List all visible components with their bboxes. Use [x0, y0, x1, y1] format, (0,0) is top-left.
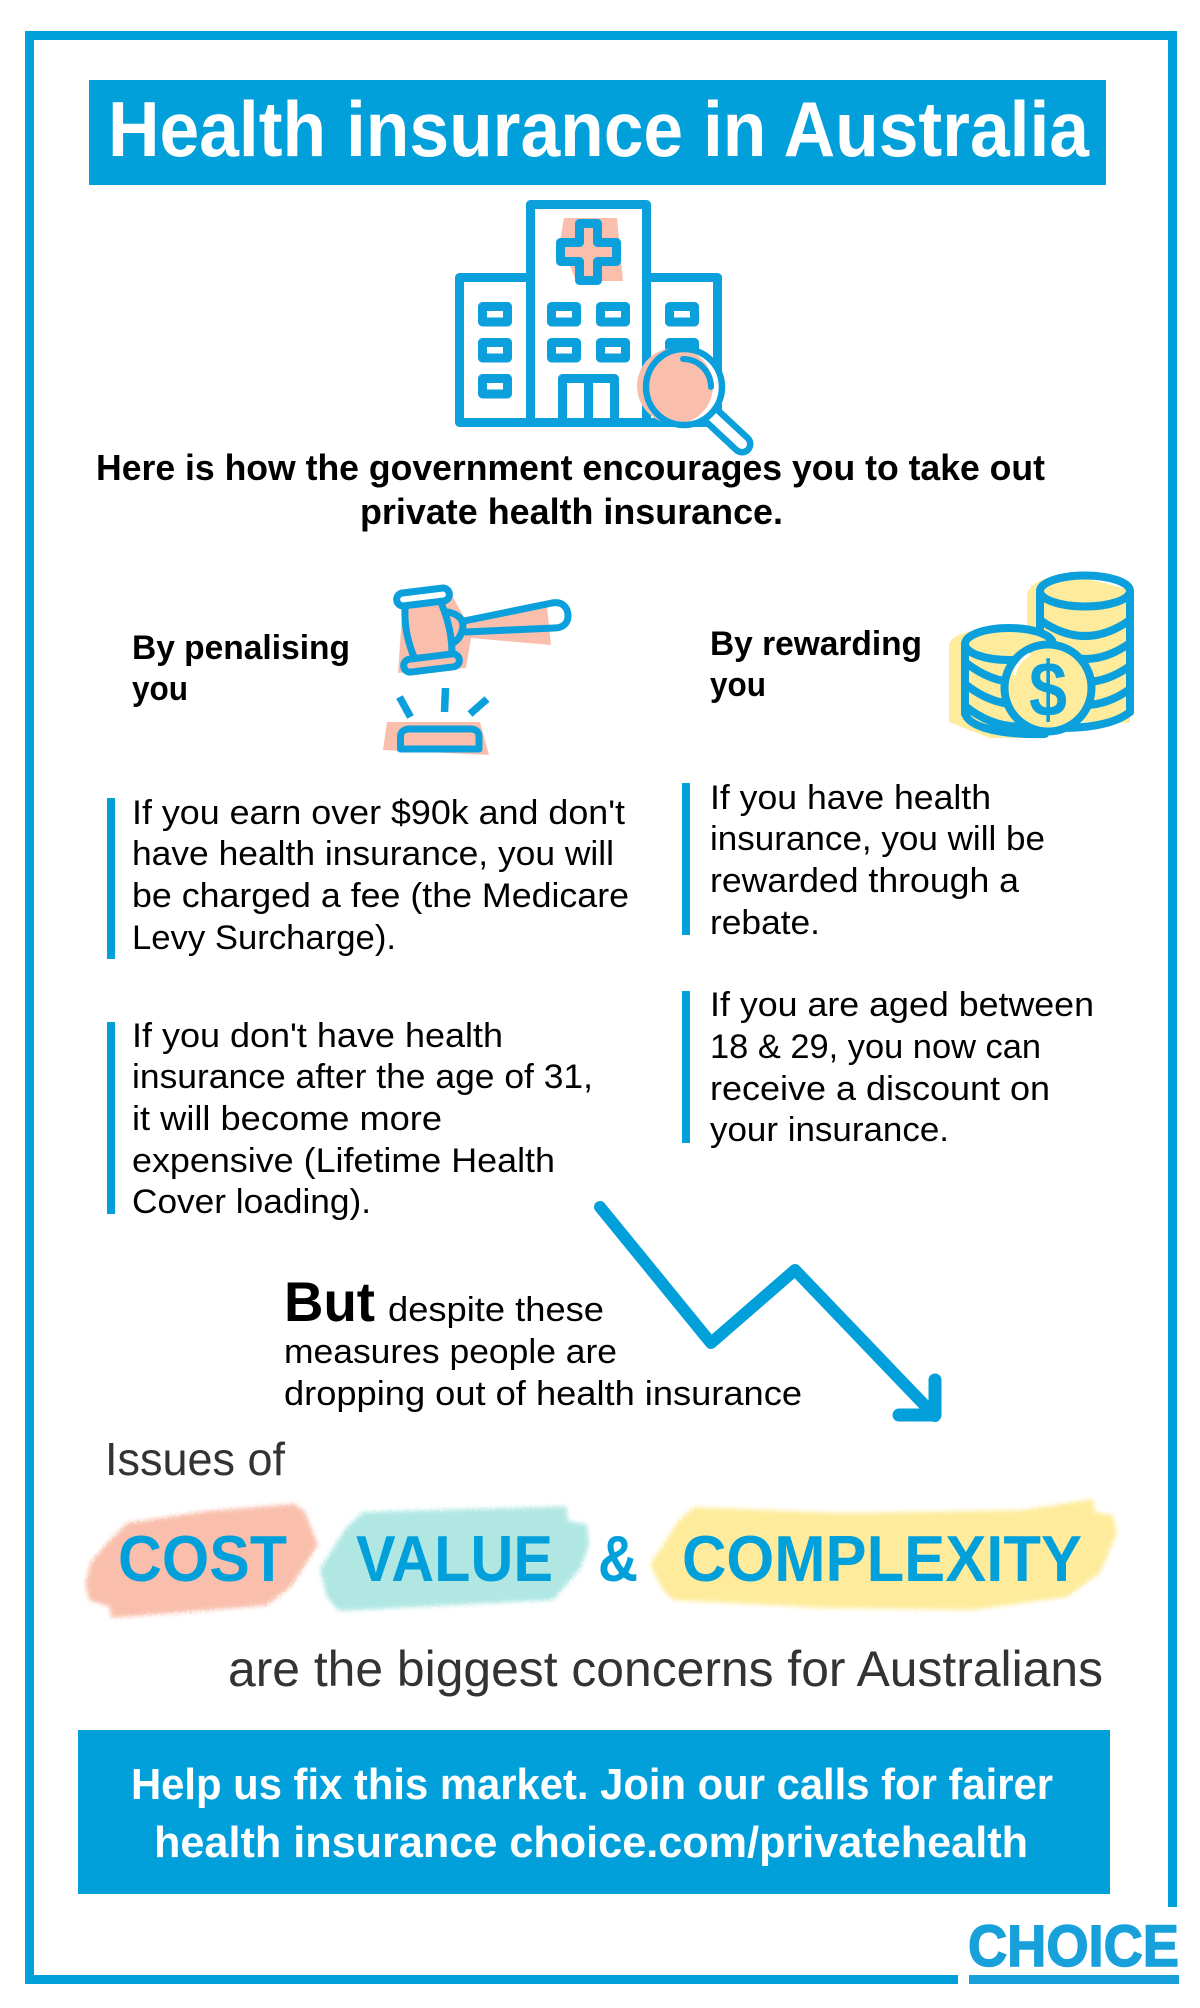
text block: rebate: rebate. [710, 904, 820, 942]
text block: rebate: If you have health [710, 779, 991, 817]
panel: by rewarding you [682, 574, 1130, 1149]
text block: rebate [682, 779, 1045, 942]
title banner: Health insurance in Australia [108, 85, 1090, 173]
heading: by penalising you [132, 629, 350, 708]
text: but despite these measures: dropping out of health insurance [284, 1375, 802, 1413]
text: biggest concerns: are the biggest concerns for Australians [228, 1641, 1103, 1697]
call to action banner: health insurance choice.com/privatehealth [154, 1818, 1028, 1867]
logo: CHOICE: CHOICE [968, 1914, 1179, 1979]
icon: coin stacks [949, 574, 1130, 738]
text block: Lifetime Health Cover loading: insurance after the age of 31, [132, 1058, 593, 1096]
text block: Medicare Levy Surcharge: have health insurance, you will [132, 835, 614, 873]
text: but despite these measures [284, 1270, 802, 1413]
text block: Lifetime Health Cover loading [107, 1017, 593, 1221]
text block: Medicare Levy Surcharge: If you earn over $90k and don't [132, 794, 626, 832]
text: but despite these measures: But [284, 1270, 375, 1333]
text block: rebate: rewarded through a [710, 862, 1019, 900]
text block: age-based discount [682, 986, 1094, 1149]
intro text: private health insurance. [360, 491, 783, 532]
intro text: Here is how the government encourages you to take out [96, 447, 1045, 488]
text: but despite these measures: measures people are [284, 1333, 617, 1371]
icon: hospital with magnifying glass [460, 204, 742, 444]
text block: Medicare Levy Surcharge: Levy Surcharge). [132, 919, 396, 957]
highlight: value: VALUE [356, 1522, 553, 1595]
text block: age-based discount: receive a discount on [710, 1070, 1050, 1108]
text block: Lifetime Health Cover loading: If you don't have health [132, 1017, 503, 1055]
highlight: cost [86, 1504, 318, 1618]
intro text [96, 447, 1045, 532]
text block: Lifetime Health Cover loading: Cover loading). [132, 1183, 371, 1221]
text: but despite these measures: despite these [388, 1291, 604, 1329]
highlight: complexity [650, 1499, 1117, 1610]
icon: coin stacks: $ [1029, 645, 1067, 733]
ampersand: & [598, 1522, 638, 1595]
call to action banner [78, 1730, 1110, 1894]
call to action banner: Help us fix this market. Join our calls for fairer [131, 1760, 1053, 1809]
text block: age-based discount: 18 & 29, you now can [710, 1028, 1041, 1066]
arrow: downward trend [600, 1207, 935, 1416]
text block: Medicare Levy Surcharge: be charged a fee (the Medicare [132, 877, 629, 915]
heading: by rewarding you: you [710, 666, 766, 704]
highlight: value [320, 1506, 589, 1611]
text: issues of: Issues of [105, 1433, 285, 1485]
highlight: complexity: COMPLEXITY [682, 1522, 1082, 1595]
panel: by penalising you [107, 587, 629, 1221]
heading: by penalising you: you [132, 670, 188, 708]
text block: age-based discount: your insurance. [710, 1111, 949, 1149]
text block: rebate: insurance, you will be [710, 820, 1045, 858]
heading: by rewarding you [710, 625, 922, 704]
text block: Medicare Levy Surcharge [107, 794, 629, 959]
text block: Lifetime Health Cover loading: expensive (Lifetime Health [132, 1142, 555, 1180]
text block: age-based discount: If you are aged between [710, 986, 1094, 1024]
highlight: cost: COST [118, 1522, 287, 1595]
text block: Lifetime Health Cover loading: it will become more [132, 1100, 442, 1138]
icon: gavel [383, 587, 568, 755]
heading: by rewarding you: By rewarding [710, 625, 922, 663]
heading: by penalising you: By penalising [132, 629, 350, 667]
